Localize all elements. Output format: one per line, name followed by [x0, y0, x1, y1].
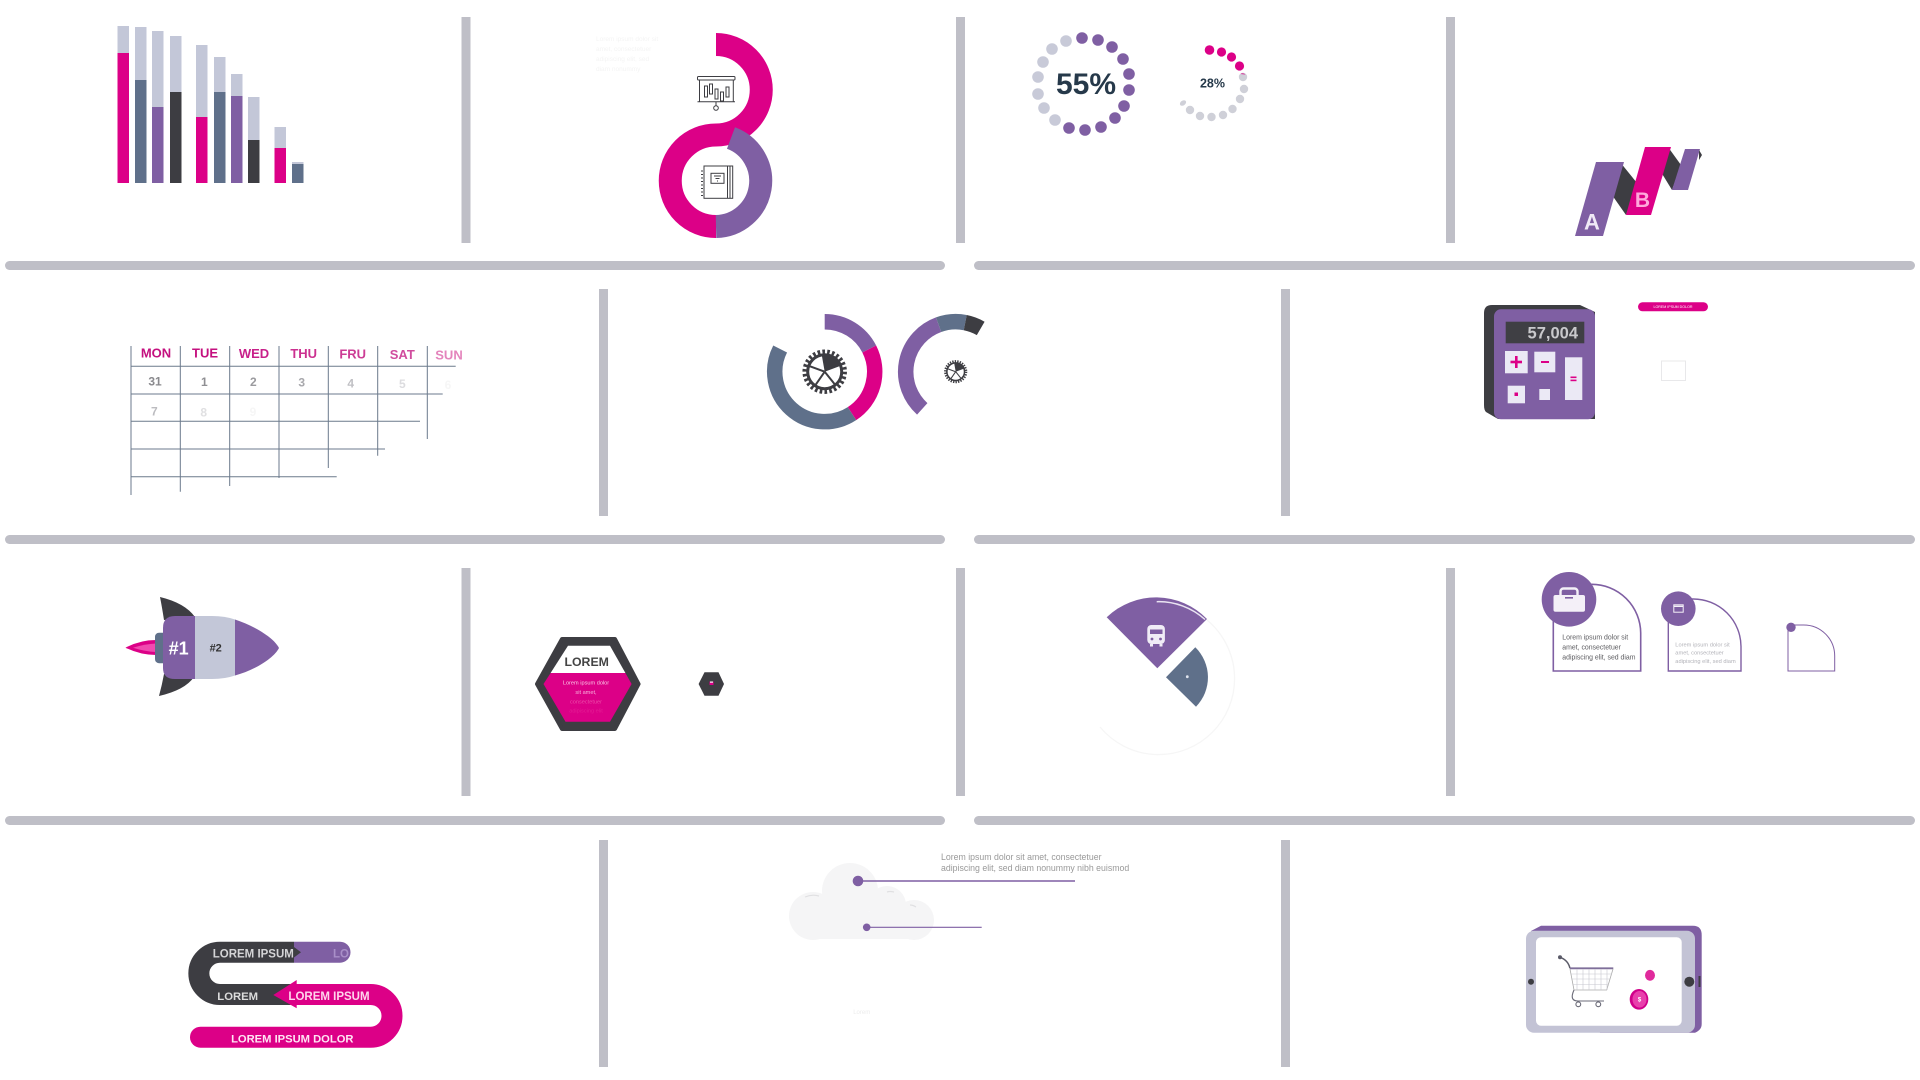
value 55%: 55%: [1056, 68, 1116, 101]
panel: calendar: TUE: [192, 346, 218, 360]
icon: small hexagon: [699, 672, 724, 696]
icon: calendar: [1674, 605, 1683, 612]
panel: calendar: SUN: [435, 348, 463, 362]
panel: info card 1: adipiscing elit, sed diam: [1562, 654, 1636, 662]
icon: bus: [1147, 625, 1165, 646]
panel: gear ring small: [906, 322, 981, 409]
panel: calendar: 31: [148, 374, 162, 388]
panel: calendar: 9: [250, 405, 257, 419]
cloud: [789, 863, 934, 940]
panel: calendar: 6: [445, 378, 452, 392]
slate sector: [1166, 647, 1208, 707]
panel: folded ribbon A B: [1575, 147, 1702, 236]
panel: tablet shopping: [1526, 926, 1702, 1033]
panel: info card 1: amet, consectetuer: [1562, 644, 1622, 652]
display: [1506, 322, 1584, 343]
icon: shopping cart: [1558, 955, 1613, 1007]
label pill: LOREM IPSUM DOLOR: [1654, 305, 1693, 309]
panel: calendar: [131, 346, 463, 495]
icon: notebook: [701, 166, 733, 198]
panel: hexagon large: adipiscing elit: [569, 709, 603, 715]
icon: coin large: $: [1638, 998, 1642, 1004]
panel: calendar: 3: [298, 376, 305, 390]
panel: snake timeline: LOREM IPSUM: [288, 991, 370, 1003]
panel: radial pie: [1100, 597, 1235, 755]
panel: figure-eight diagram: [596, 36, 761, 226]
panel: calendar: 2: [250, 375, 257, 389]
panel: calendar: 8: [200, 406, 207, 420]
panel: info card 2: [1661, 591, 1741, 671]
panel: info card 2: amet, consectetuer: [1675, 651, 1724, 657]
dark U band: [199, 952, 300, 994]
faint box: [1662, 361, 1686, 380]
panel: snake timeline: LO: [333, 948, 349, 960]
panel: calendar: FRU: [339, 346, 366, 362]
callout text: adipiscing elit, sed diam nonummy nibh euismod: [941, 863, 1129, 873]
panel: snake timeline: LOREM: [217, 991, 258, 1003]
icon: presentation board: [698, 76, 735, 110]
panel: folded ribbon A B: A: [1584, 210, 1600, 234]
icon: small gear: [945, 361, 966, 382]
panel: hexagon large: sit amet,: [575, 690, 597, 696]
panel: hexagon large: [537, 639, 639, 729]
panel: dotted progress 55%: [1032, 32, 1135, 136]
panel: snake timeline: [190, 942, 392, 1048]
icon: briefcase: [1554, 588, 1585, 612]
panel: hexagon large: consectetuer: [570, 699, 602, 705]
panel: calculator: [1484, 305, 1595, 419]
label pill: [1638, 302, 1708, 311]
purple sector: [1107, 597, 1207, 668]
buttons: [1505, 351, 1582, 403]
panel: folded ribbon A B: B: [1635, 189, 1650, 212]
magenta U band: [200, 994, 392, 1037]
panel: calculator: 57,004: [1528, 324, 1579, 342]
panel: calendar: 4: [347, 376, 354, 390]
faint text block: amet, consectetuer: [596, 46, 652, 53]
panel: cloud callouts: [789, 852, 1129, 1016]
panel: snake timeline: LOREM IPSUM DOLOR: [231, 1034, 354, 1046]
panel: calendar: 5: [399, 377, 406, 391]
icon: gear: [805, 352, 845, 392]
panel: info card 1: [1542, 572, 1641, 671]
panel: stacked bar chart: [118, 26, 304, 183]
nozzle: [155, 633, 167, 663]
body: [163, 616, 195, 679]
faint text block: diam nonummy: [596, 66, 641, 73]
panel: calendar: SAT: [390, 347, 415, 362]
value 28%: 28%: [1200, 76, 1225, 90]
panel: dotted progress 28%: [1179, 45, 1248, 121]
flame: [126, 640, 156, 655]
panel: hexagon large: LOREM: [564, 655, 609, 669]
panel: hexagon large: Lorem ipsum dolor: [563, 681, 609, 687]
panel: info card 2: adipiscing elit, sed diam: [1675, 659, 1736, 665]
panel: snake timeline: LOREM IPSUM: [213, 948, 294, 960]
panel: rocket: #1: [169, 638, 189, 658]
panel: rocket: [126, 597, 279, 696]
panel: info card 3: [1786, 623, 1835, 671]
purple arc: [716, 138, 761, 226]
fins: [160, 597, 195, 620]
panel: calendar: MON: [141, 346, 171, 360]
panel: calendar: THU: [290, 346, 317, 361]
panel: calendar: WED: [239, 346, 269, 361]
callout line 1: [853, 876, 1075, 886]
faint text block: adipiscing elit, sed: [596, 56, 649, 63]
faint text block: Lorem ipsum dolor sit: [596, 36, 658, 43]
magenta S ribbon: [670, 44, 761, 226]
icon: coin small: [1645, 970, 1655, 981]
panel: info card 1: Lorem ipsum dolor sit: [1562, 634, 1628, 642]
icon: coin large: [1630, 989, 1648, 1010]
panel: rocket: #2: [210, 643, 222, 655]
panel: calendar: 1: [201, 375, 208, 389]
panel: calendar: 7: [151, 404, 158, 418]
purple band: [294, 942, 351, 963]
callout text: Lorem ipsum dolor sit amet, consectetuer: [941, 852, 1102, 862]
panel: gear ring large: [775, 322, 875, 422]
panel: info card 2: Lorem ipsum dolor sit: [1675, 642, 1730, 648]
panel: cloud callouts: Lorem: [853, 1010, 870, 1016]
callout line 2: [863, 924, 982, 931]
